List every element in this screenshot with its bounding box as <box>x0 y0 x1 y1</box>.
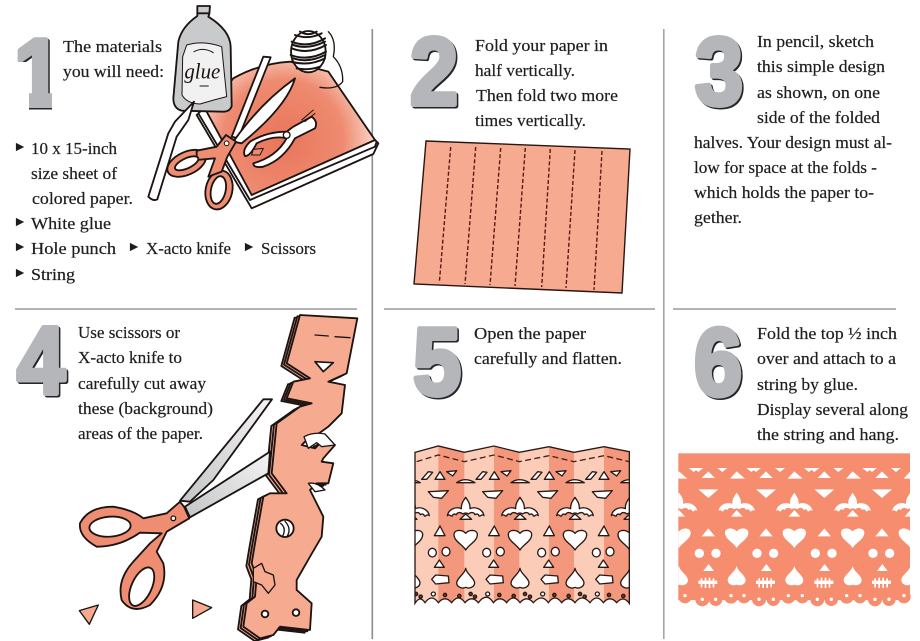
text: cut instructions: these (background) <box>78 399 213 418</box>
illustration: scissors cutting folded strip <box>79 315 357 641</box>
intro text: you will need: <box>63 62 164 81</box>
materials list: Scissors <box>261 239 316 258</box>
materials list: Hole punch <box>31 239 117 258</box>
step number 6: 6 <box>694 309 742 416</box>
text: fold instructions: Fold your paper in <box>475 36 608 55</box>
materials list: X-acto knife <box>146 239 231 258</box>
text: cut instructions: X-acto knife to <box>78 348 182 367</box>
text: sketch instructions: side of the folded <box>757 108 881 127</box>
illustration: opened paper with folds <box>414 445 630 606</box>
panel: step 2 fold <box>410 18 630 293</box>
step number 3: 3 <box>696 20 745 127</box>
text: sketch instructions <box>694 32 892 227</box>
panel: step 3 sketch <box>694 18 892 227</box>
materials list <box>16 139 316 284</box>
step number 5: 5 <box>413 308 461 416</box>
icon: scissors <box>163 57 295 212</box>
illustration: folded sheet with fold lines <box>414 141 630 293</box>
materials list: colored paper. <box>32 189 133 208</box>
text: open instructions: Open the paper <box>474 324 587 343</box>
text: sketch instructions: In pencil, sketch <box>757 32 875 51</box>
step number 2: 2 <box>412 20 460 127</box>
text: display instructions: the string and hang. <box>757 425 899 444</box>
step number 5: 5 <box>414 310 463 417</box>
text: display instructions: Fold the top ½ inch <box>757 324 898 343</box>
materials list: White glue <box>31 214 111 233</box>
text: sketch instructions: as shown, on one <box>757 83 880 102</box>
text: sketch instructions: halves. Your design must al- <box>694 133 892 152</box>
scissors <box>80 399 272 610</box>
panel: step 5 open <box>413 326 630 606</box>
text: display instructions: over and attach to a <box>757 349 897 368</box>
step number 4: 4 <box>18 309 67 416</box>
text: display instructions: string by glue. <box>757 375 858 394</box>
text: cut instructions <box>78 323 213 443</box>
text: display instructions: Display several along <box>757 400 908 419</box>
step number 2: 2 <box>410 18 458 126</box>
text: sketch instructions: this simple design <box>757 57 885 76</box>
panel: step 1 materials <box>14 6 378 284</box>
text: display instructions <box>757 324 908 444</box>
text: open instructions: carefully and flatten. <box>474 349 622 368</box>
text: open instructions <box>474 324 622 368</box>
step number 1: 1 <box>16 21 64 128</box>
text: sketch instructions: which holds the paper to- <box>694 183 874 202</box>
icon: hole punch <box>244 110 316 167</box>
materials list: 10 x 15-inch <box>31 139 118 158</box>
cut-away triangle <box>193 600 212 618</box>
materials list: size sheet of <box>31 164 118 183</box>
icon: glue bottle <box>173 6 232 112</box>
icon: x-acto knife <box>148 102 194 200</box>
materials list: String <box>31 265 75 284</box>
text: fold instructions: Then fold two more <box>476 86 618 105</box>
text: cut instructions: areas of the paper. <box>78 424 203 443</box>
panel: step 6 display <box>678 326 911 606</box>
text: fold instructions: half vertically. <box>475 61 575 80</box>
step number 6: 6 <box>696 310 744 418</box>
illustration: materials <box>148 6 378 212</box>
cut-away triangle <box>79 605 98 624</box>
step number 1: 1 <box>14 19 62 127</box>
icon: paper stack <box>197 62 378 208</box>
text: fold instructions: times vertically. <box>475 111 586 130</box>
step number 4: 4 <box>17 307 65 415</box>
icon: string ball <box>291 31 343 88</box>
step number 1 <box>18 37 52 110</box>
intro text: The materials <box>63 37 162 56</box>
text: sketch instructions: gether. <box>694 208 742 227</box>
text: sketch instructions: low for space at the folds - <box>694 158 877 177</box>
step number 3: 3 <box>695 18 743 126</box>
text: fold instructions <box>475 36 618 130</box>
text: cut instructions: carefully cut away <box>78 374 207 393</box>
text: cut instructions: Use scissors or <box>78 323 181 342</box>
icon: glue bottle: glue <box>184 58 221 83</box>
panel: step 4 cut <box>17 307 357 641</box>
illustration: finished papel picado banner <box>678 453 911 606</box>
folded paper strip <box>238 315 357 641</box>
intro text <box>63 37 164 81</box>
